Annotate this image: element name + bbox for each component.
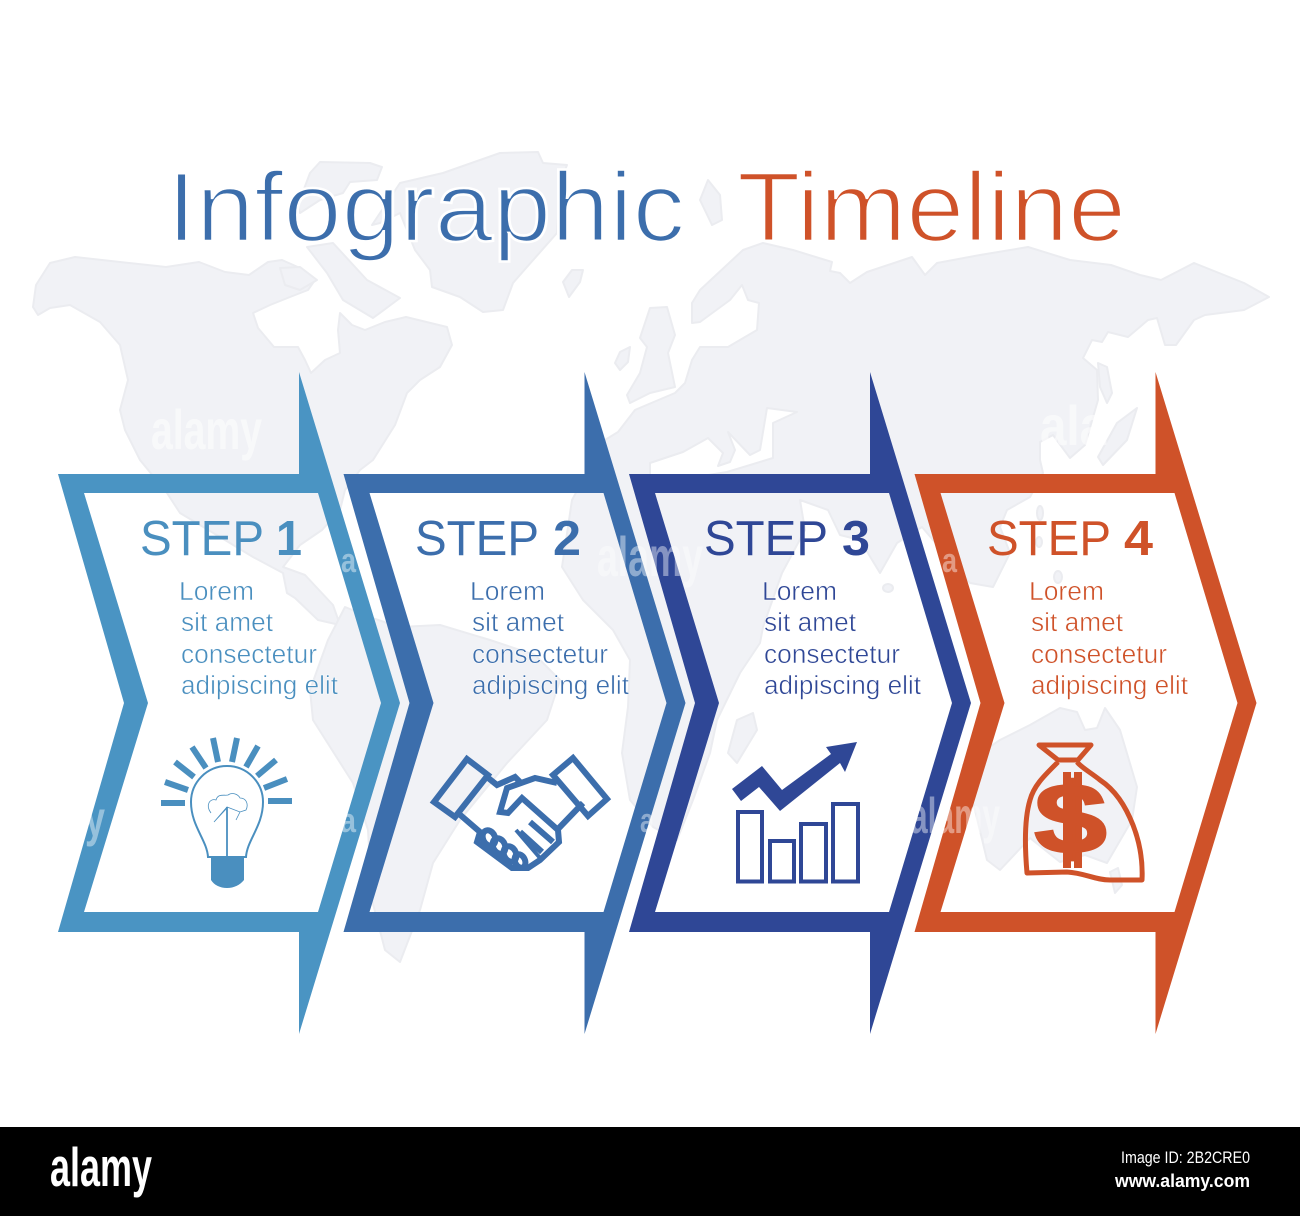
text block 4: adipiscing elit — [1031, 672, 1188, 700]
heading: step 1: 1 — [276, 512, 302, 566]
watermark over arrows: a — [640, 802, 655, 840]
text block 1 — [179, 578, 338, 700]
watermark over arrows: a — [340, 802, 357, 840]
text block 2 — [470, 578, 629, 700]
text block 4: consectetur — [1031, 641, 1168, 669]
image id: Image ID: 2B2CRE0 — [1121, 1148, 1250, 1167]
heading: step 3: STEP — [704, 512, 828, 566]
icon: rising bar chart — [732, 742, 858, 882]
panel: step 2 — [344, 372, 686, 1034]
text block 2: adipiscing elit — [472, 672, 629, 700]
website: www.alamy.com — [1114, 1171, 1250, 1191]
text block 3: adipiscing elit — [764, 672, 921, 700]
panel: step 4 — [914, 372, 1256, 1034]
chevron frame 3 — [629, 372, 971, 1034]
heading: step 2: STEP — [415, 512, 539, 566]
title word: Timeline: Timeline — [737, 152, 1126, 262]
text block 2: Lorem — [470, 578, 545, 606]
icon: money bag — [1025, 745, 1142, 880]
footer logo: alamy — [50, 1136, 152, 1198]
watermark over arrows: y — [85, 791, 105, 847]
text block 1: adipiscing elit — [181, 672, 338, 700]
text block 1: consectetur — [181, 641, 318, 669]
title word: Infographic: Infographic — [167, 152, 685, 262]
text block 1: Lorem — [179, 578, 254, 606]
watermark behind arrows — [151, 394, 1107, 461]
chevron frame 4 — [914, 372, 1256, 1034]
text block 4: Lorem — [1029, 578, 1104, 606]
heading: step 4: 4 — [1124, 512, 1153, 566]
title — [167, 152, 1126, 262]
watermark behind arrows: alamy — [151, 398, 262, 461]
icon: money bag: $ — [1034, 763, 1107, 875]
heading: step 1: STEP — [140, 512, 264, 566]
watermark over arrows — [85, 525, 1000, 847]
text block 4: sit amet — [1031, 609, 1123, 637]
icon: handshake — [434, 758, 607, 869]
text block 3: consectetur — [764, 641, 901, 669]
text block 3: Lorem — [762, 578, 837, 606]
watermark over arrows: alamy — [597, 525, 703, 588]
watermark over arrows: a — [341, 542, 357, 580]
watermark behind arrows: ala — [1040, 394, 1107, 457]
chevron frame 1 — [58, 372, 400, 1034]
footer bar — [0, 1127, 1300, 1216]
watermark over arrows: a — [942, 542, 958, 580]
icon: light bulb — [161, 738, 292, 888]
text block 2: sit amet — [472, 609, 564, 637]
heading: step 2: 2 — [553, 512, 581, 566]
text block 1: sit amet — [181, 609, 273, 637]
text block 4 — [1029, 578, 1188, 700]
panel: step 3 — [629, 372, 971, 1034]
text block 2: consectetur — [472, 641, 609, 669]
text block 3 — [762, 578, 921, 700]
chevron frame 2 — [344, 372, 686, 1034]
watermark over arrows: alamy — [910, 788, 1000, 844]
world map background — [33, 152, 1269, 962]
panel: step 1 — [58, 372, 400, 1034]
heading: step 4: STEP — [987, 512, 1111, 566]
text block 3: sit amet — [764, 609, 856, 637]
heading: step 3: 3 — [842, 512, 870, 566]
